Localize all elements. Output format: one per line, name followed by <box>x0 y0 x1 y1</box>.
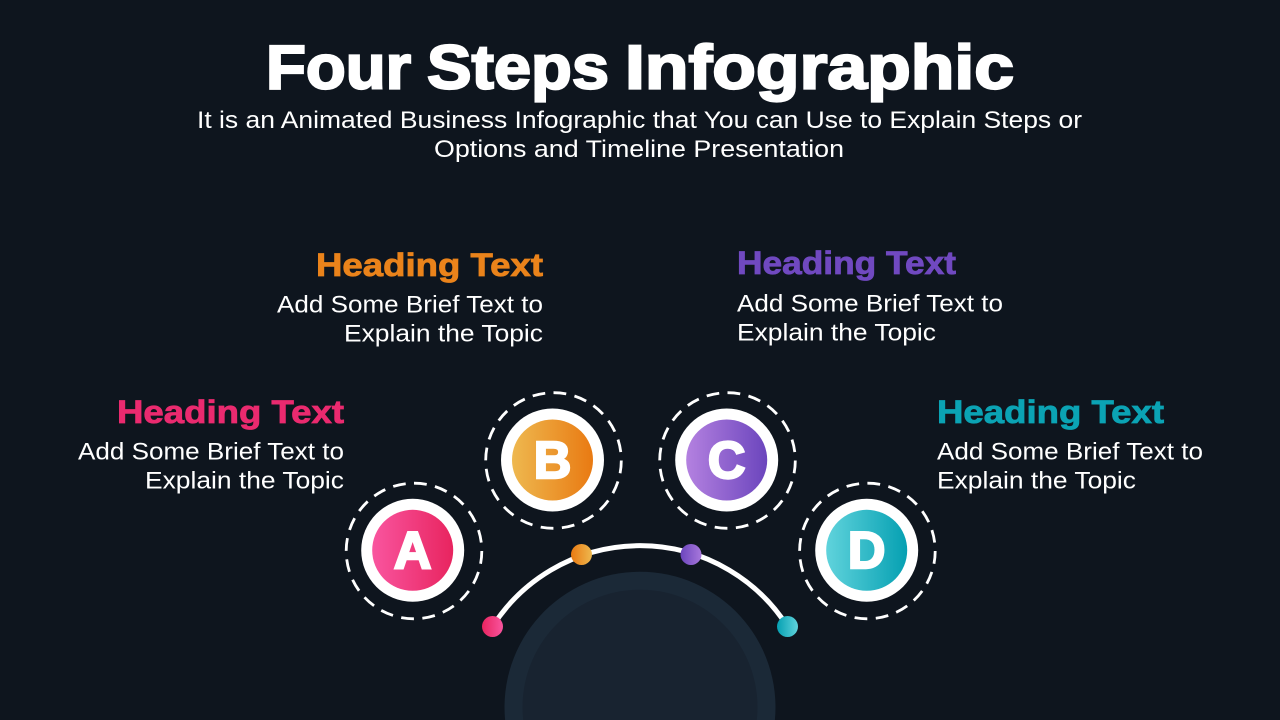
icon: badge B: B <box>534 432 571 490</box>
heading A: Heading Text <box>117 394 344 430</box>
icon: badge C: C <box>708 432 745 490</box>
dot B <box>571 544 592 565</box>
body B <box>277 292 543 348</box>
icon: badge B <box>486 393 621 528</box>
body B: Add Some Brief Text to <box>277 292 543 318</box>
title: Four <box>266 32 411 102</box>
arc connector <box>492 546 788 626</box>
body C: Add Some Brief Text to <box>737 290 1003 318</box>
icon: badge A: A <box>394 522 431 580</box>
heading C: Heading Text <box>737 245 956 281</box>
subtitle: Options and Timeline Presentation <box>434 136 844 163</box>
body A: Explain the Topic <box>145 468 344 494</box>
dot D <box>777 616 798 637</box>
dot C <box>680 544 702 565</box>
subtitle <box>197 107 1082 163</box>
heading D: Heading Text <box>937 394 1164 430</box>
title: Infographic <box>625 32 1014 102</box>
panel: step D text <box>937 394 1203 494</box>
semicircle base <box>505 572 776 720</box>
icon: badge A <box>346 483 482 619</box>
body C <box>737 290 1003 346</box>
title: Steps <box>427 32 609 102</box>
heading B: Heading Text <box>316 247 543 283</box>
panel: step B text <box>277 247 543 348</box>
body A: Add Some Brief Text to <box>78 438 344 466</box>
subtitle: It is an Animated Business Infographic that You can Use to Explain Steps or <box>197 107 1082 134</box>
body D: Add Some Brief Text to <box>937 438 1203 466</box>
body D <box>937 438 1203 494</box>
body B: Explain the Topic <box>344 320 543 348</box>
icon: badge D: D <box>848 522 885 580</box>
dot A <box>482 616 503 637</box>
panel: step C text <box>737 245 1003 346</box>
body A <box>78 438 344 494</box>
body C: Explain the Topic <box>737 320 936 346</box>
body D: Explain the Topic <box>937 468 1136 494</box>
icon: badge D <box>800 483 935 619</box>
icon: badge C <box>660 393 795 528</box>
panel: step A text <box>78 394 344 494</box>
